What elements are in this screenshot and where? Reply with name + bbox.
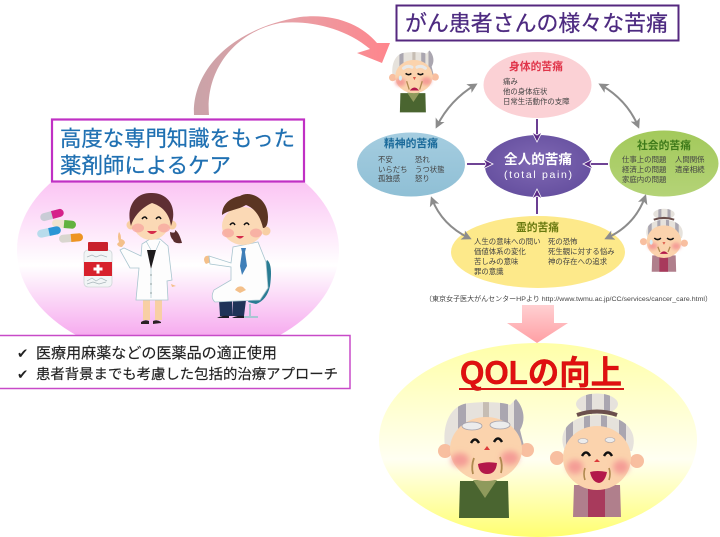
panel: spiritual pain: 罪の意識	[474, 267, 504, 276]
text box: care checklist: ✔	[17, 367, 28, 382]
panel: social pain: 人間関係	[675, 155, 705, 164]
panel: spiritual pain: 死生観に対する悩み	[548, 247, 615, 256]
title: various sufferings of cancer patients	[396, 6, 678, 40]
title: various sufferings of cancer patients: がん患者さんの様々な苦痛	[405, 11, 668, 36]
panel: mental pain: 不安	[378, 155, 393, 164]
panel: spiritual pain: 価値体系の変化	[474, 247, 526, 256]
panel: spiritual pain: 死の恐怖	[548, 237, 578, 246]
panel: social pain: 経済上の問題	[622, 165, 667, 174]
source citation: （東京女子医大がんセンターHPより http://www.twmu.ac.jp/CC/services/cancer_care.html）	[425, 294, 712, 303]
panel: physical pain: 身体的苦痛	[509, 59, 563, 73]
arrows: purple arrows to total pain	[467, 119, 608, 214]
panel: spiritual pain: 苦しみの意味	[474, 257, 519, 266]
panel: social pain: 社会的苦痛	[637, 138, 691, 152]
panel: pharmacist care oval	[17, 140, 339, 360]
panel: social pain: 遺産相続	[675, 165, 705, 174]
icon: sad old man	[389, 50, 439, 112]
arrow: pink down arrow to QOL	[507, 305, 568, 343]
panel: social pain: 仕事上の問題	[622, 155, 667, 164]
icon: sad old woman	[640, 208, 688, 272]
panel: mental pain: 精神的苦痛	[384, 136, 438, 150]
text box: care checklist: 患者背景までも考慮した包括的治療アプローチ	[36, 366, 338, 383]
panel: physical pain: 痛み	[503, 77, 518, 86]
panel: spiritual pain: 人生の意味への問い	[474, 237, 541, 246]
text box: care checklist: 医療用麻薬などの医薬品の適正使用	[36, 345, 277, 362]
heading box: pharmacist care	[52, 120, 304, 182]
panel: mental pain: いらだち	[378, 165, 408, 174]
panel: mental pain	[357, 132, 465, 196]
panel: QOL improvement oval	[379, 343, 697, 537]
panel: total pain: 全人的苦痛	[504, 151, 572, 167]
panel: spiritual pain: 神の存在への追求	[548, 257, 608, 266]
text box: care checklist	[0, 336, 350, 388]
panel: mental pain: 恐れ	[415, 155, 430, 164]
panel: total pain: (total pain)	[504, 169, 572, 181]
icon: medicine bottle	[84, 242, 112, 287]
panel: physical pain: 他の身体症状	[503, 87, 548, 96]
panel: physical pain: 日常生活動作の支障	[503, 97, 570, 106]
icon: female pharmacist	[117, 193, 182, 324]
icon: male pharmacist seated	[204, 194, 271, 318]
heading: QOL improvement: QOLの向上	[460, 354, 622, 391]
icon: smiling old man	[438, 398, 534, 518]
panel: spiritual pain: 霊的苦痛	[516, 220, 559, 234]
heading box: pharmacist care: 高度な専門知識をもった	[60, 127, 295, 151]
panel: social pain	[610, 130, 718, 196]
panel: social pain: 家庭内の問題	[622, 175, 667, 184]
panel: mental pain: うつ状態	[415, 165, 445, 174]
text box: care checklist: ✔	[17, 346, 28, 361]
panel: mental pain: 怒り	[415, 174, 430, 183]
icon: smiling old woman	[550, 392, 644, 517]
arrows: grey double-headed connectors	[432, 85, 645, 238]
panel: mental pain: 孤独感	[378, 174, 401, 183]
panel: spiritual pain	[451, 216, 625, 288]
heading box: pharmacist care: 薬剤師によるケア	[60, 154, 231, 178]
icon: capsules	[36, 208, 83, 243]
panel: physical pain	[484, 52, 592, 118]
panel: total pain	[485, 135, 591, 197]
curved arrow to patient pain	[194, 16, 390, 115]
